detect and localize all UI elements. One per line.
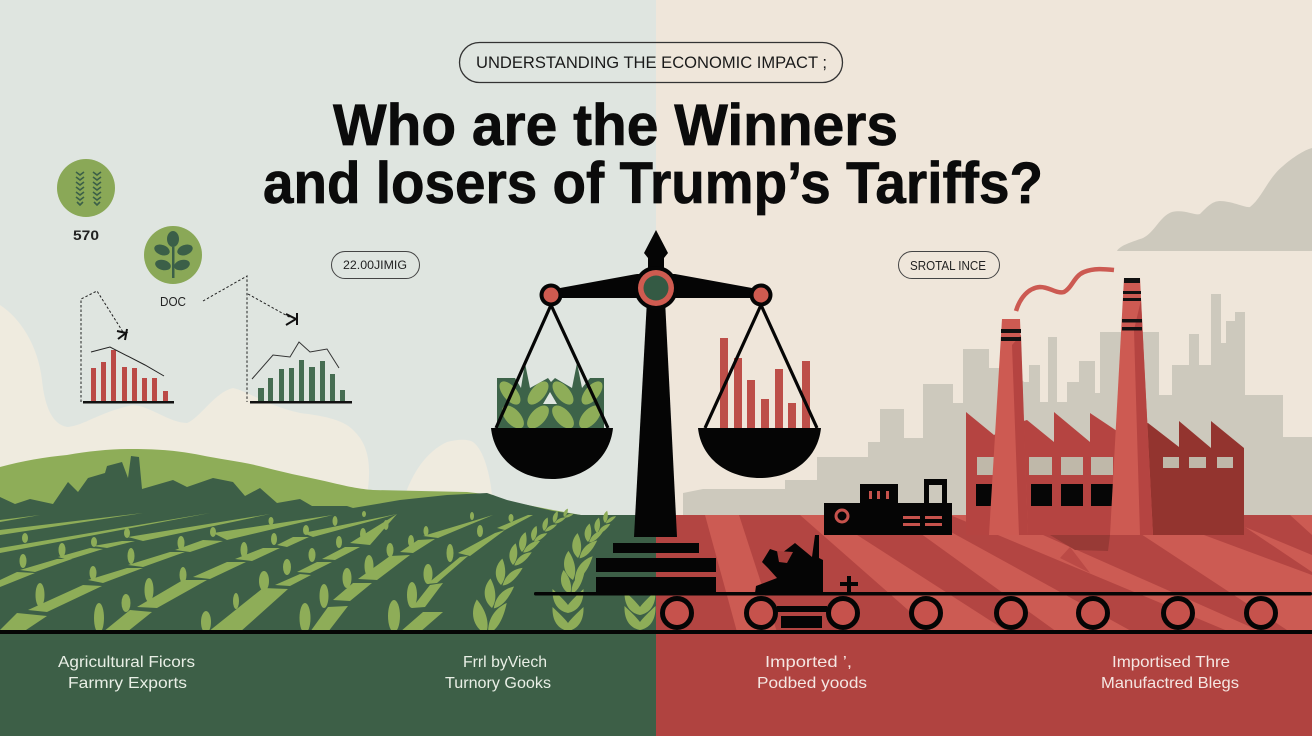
panel: right red field with radiating stripes	[656, 515, 1312, 640]
title	[263, 93, 1043, 216]
light green hill	[0, 449, 581, 540]
label: manufactured goods	[1101, 654, 1239, 692]
icon: forklift machine	[755, 535, 858, 628]
icon: wheat circle	[57, 159, 115, 217]
right pan bars	[720, 338, 810, 428]
right pivot	[750, 284, 772, 306]
balance scale	[491, 230, 821, 594]
icon: small locomotive machine	[824, 479, 952, 535]
chart: green rising bars	[203, 276, 352, 404]
scale base steps	[596, 543, 716, 594]
label: turnory goods: Frrl byViech	[463, 654, 547, 671]
left pill label	[332, 252, 420, 278]
label: manufactured goods: Importised Thre	[1112, 654, 1230, 671]
right pill label	[898, 252, 1000, 278]
scale column	[634, 300, 677, 537]
scale finial	[644, 230, 668, 270]
label: imported goods: Podbed yoods	[757, 675, 867, 692]
panel: left dark field with tree line	[0, 456, 656, 640]
icon: right chimney	[1110, 278, 1153, 535]
top pill tag: UNDERSTANDING THE ECONOMIC IMPACT ;	[476, 53, 827, 72]
scale beam	[560, 274, 752, 298]
right pan	[698, 428, 821, 478]
icon: left chimney	[989, 319, 1028, 535]
upper conveyor rail	[534, 592, 1312, 596]
panel: bottom left green band	[0, 632, 656, 736]
crop rows	[0, 508, 656, 634]
label: imported goods: Imported ’,	[765, 654, 852, 671]
title: Who are the Winners	[333, 93, 898, 158]
label: manufactured goods: Manufactred Blegs	[1101, 675, 1239, 692]
label: DOC: DOC	[160, 294, 186, 309]
left pan	[491, 428, 613, 479]
center hub	[634, 266, 678, 310]
factory with chimneys	[966, 269, 1244, 535]
panel: bottom right red band	[656, 632, 1312, 736]
conveyor wheels	[662, 598, 1276, 628]
label: 570: 570	[73, 228, 99, 243]
label: turnory goods	[445, 654, 551, 692]
left pill label: 22.00JIMIG	[343, 258, 407, 272]
panel: left sky background	[0, 0, 656, 540]
label: imported goods	[757, 654, 867, 692]
chart: red declining bars	[81, 291, 174, 404]
icon: plant circle	[144, 226, 202, 284]
gray city skyline	[683, 294, 1312, 515]
left pan leaves	[496, 363, 606, 432]
label: agricultural exports	[58, 654, 195, 692]
title: and losers of Trump’s Tariffs?	[263, 151, 1043, 216]
label: turnory goods: Turnory Gooks	[445, 675, 551, 692]
icon: chimney smoke	[1016, 269, 1114, 311]
label: agricultural exports: Agricultural Ficors	[58, 654, 195, 671]
left pivot	[540, 284, 562, 306]
lower conveyor rail	[0, 630, 1312, 634]
panel: right sky background	[656, 0, 1312, 540]
scale ropes	[496, 305, 817, 428]
gray cloud	[1117, 148, 1312, 251]
label: agricultural exports: Farmry Exports	[68, 675, 187, 692]
top pill tag	[460, 42, 842, 82]
right pill label: SROTAL INCE	[910, 259, 986, 273]
cream hills behind farmland	[0, 305, 492, 495]
